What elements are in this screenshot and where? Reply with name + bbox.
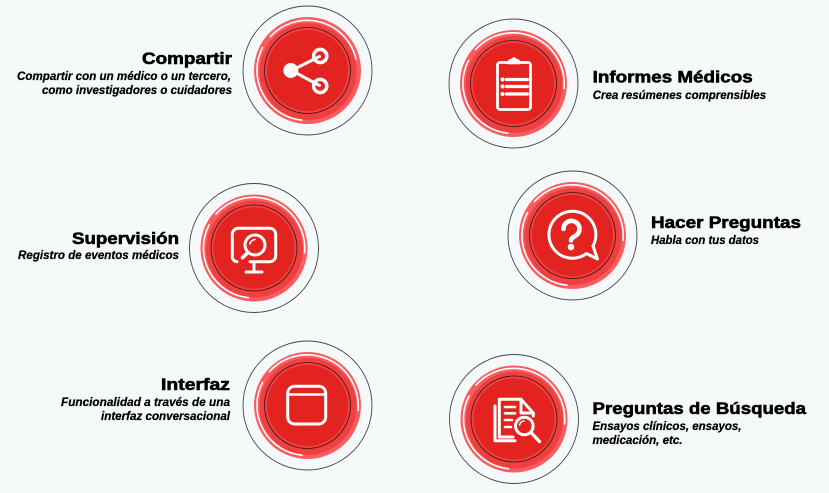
panel: Hacer Preguntas <box>508 171 801 300</box>
text: Preguntas de Búsqueda description: Ensayos clínicos, ensayos, <box>592 421 742 433</box>
badge: Supervisión <box>190 184 318 312</box>
badge: Informes Médicos <box>449 19 578 148</box>
heading: Preguntas de Búsqueda: Preguntas de Búsqueda <box>592 399 807 418</box>
text: Interfaz description: Funcionalidad a través de una <box>61 397 231 409</box>
text: Compartir description: como investigadores o cuidadores <box>42 85 232 97</box>
panel: Informes Médicos <box>449 19 766 148</box>
badge: Hacer Preguntas <box>508 171 637 300</box>
icon: app window <box>288 386 326 424</box>
icon: document with magnifier <box>495 399 540 442</box>
heading: Hacer Preguntas: Hacer Preguntas <box>651 213 801 232</box>
icon: question bubble <box>549 211 598 259</box>
heading: Compartir: Compartir <box>142 49 232 68</box>
panel: Preguntas de Búsqueda <box>450 354 807 484</box>
heading: Interfaz: Interfaz <box>161 375 230 394</box>
heading: Supervisión: Supervisión <box>72 229 179 248</box>
badge: Compartir <box>243 6 372 135</box>
text: Preguntas de Búsqueda description <box>592 421 742 447</box>
icon: monitor with magnifier <box>232 228 276 272</box>
text: Interfaz description <box>61 397 231 423</box>
heading: Informes Médicos: Informes Médicos <box>593 68 753 87</box>
text: Hacer Preguntas description: Habla con tus datos <box>651 235 759 247</box>
badge: Interfaz <box>243 341 372 470</box>
text: Compartir description <box>17 71 232 97</box>
panel: Compartir <box>17 6 372 135</box>
icon: clipboard <box>498 58 530 110</box>
text: Compartir description: Compartir con un médico o un tercero, <box>17 71 231 83</box>
text: Supervisión description: Registro de eventos médicos <box>18 250 179 262</box>
text: Informes Médicos description: Crea resúmenes comprensibles <box>593 90 766 102</box>
panel: Supervisión <box>18 184 318 312</box>
icon: share <box>283 49 327 93</box>
panel: Interfaz <box>61 341 372 470</box>
text: Interfaz description: interfaz conversacional <box>101 411 231 423</box>
badge: Preguntas de Búsqueda <box>450 354 578 484</box>
text: Preguntas de Búsqueda description: medicación, etc. <box>592 435 682 447</box>
